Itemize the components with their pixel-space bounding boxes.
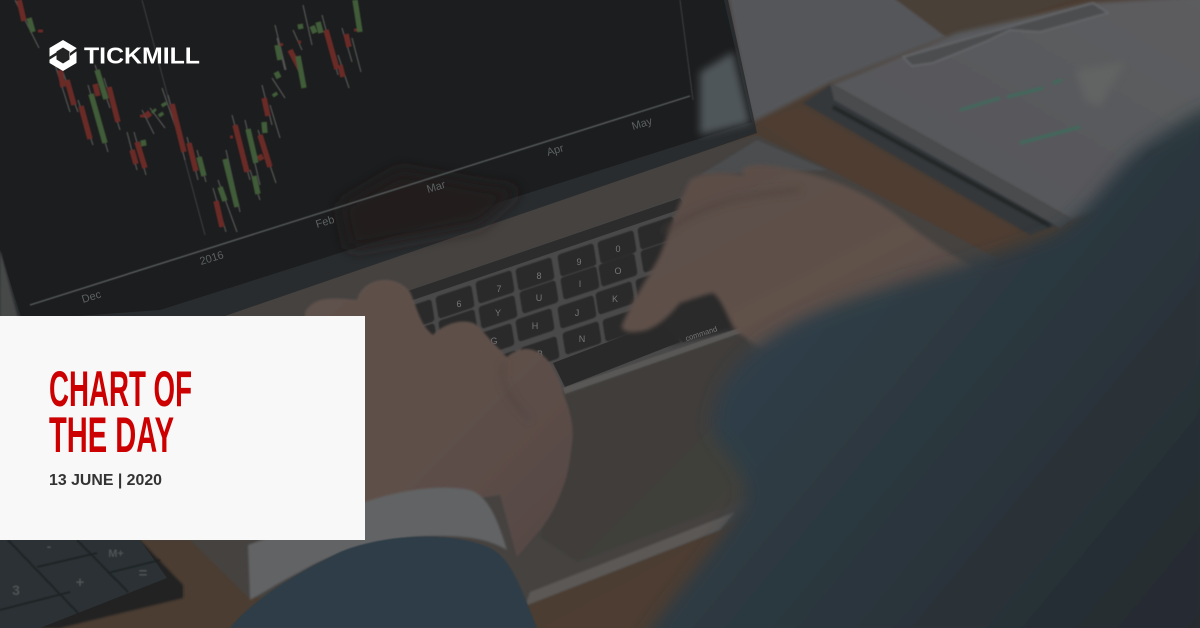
key labels: N [579, 334, 585, 344]
spacebar [553, 322, 680, 387]
key labels: K [612, 294, 618, 304]
key labels: 6 [456, 299, 462, 309]
calculator [0, 538, 183, 628]
key labels: B [537, 349, 543, 359]
calculator key labels: + [76, 574, 85, 591]
laptop base [0, 135, 1000, 606]
keyboard [370, 196, 760, 394]
chart axis labels: Apr [545, 142, 566, 159]
right hand [622, 165, 975, 350]
paperwork on desk [728, 0, 1200, 235]
paper clip bar [903, 3, 1108, 66]
key labels: H [532, 321, 538, 331]
chart axis labels: 2016 [198, 249, 225, 268]
heading: CHART OF [49, 361, 192, 417]
calculator key labels: 3 [12, 582, 20, 598]
key labels: G [490, 336, 498, 346]
logo: Tickmill [49, 40, 200, 71]
logo wordmark: TICKMILL [84, 42, 200, 68]
shadow under right hand [640, 275, 760, 345]
key labels: 8 [536, 271, 542, 281]
heading: THE DAY [49, 407, 174, 463]
trackpad [540, 332, 770, 562]
key labels: Y [495, 308, 501, 318]
chart axis labels: Dec [80, 289, 103, 306]
screen reflection [700, 52, 750, 135]
key labels: I [579, 279, 581, 289]
calculator key labels: M+ [108, 548, 124, 560]
chart axis labels: Mar [425, 179, 447, 196]
candlestick chart [15, 0, 693, 305]
shirt cuff [248, 488, 507, 600]
heading [49, 361, 192, 463]
chart axis labels [80, 115, 654, 306]
chart axis labels: May [630, 115, 654, 133]
icon: hexagon mark [49, 40, 77, 71]
key labels: 0 [615, 244, 621, 254]
key labels: 7 [496, 284, 502, 294]
key labels: 9 [576, 257, 582, 267]
calculator key labels: - [47, 538, 52, 554]
panel: chart of the day [0, 316, 365, 540]
left sleeve [230, 537, 537, 628]
calculator key labels: = [139, 565, 148, 582]
key labels: command [684, 324, 718, 343]
date: 13 JUNE | 2020 [49, 472, 162, 489]
key labels: O [614, 266, 622, 276]
blurred suit shoulder [640, 105, 1200, 628]
chart axis labels: Feb [314, 214, 336, 231]
key labels: U [536, 293, 542, 303]
calculator key labels [12, 538, 148, 598]
key labels: J [575, 308, 579, 318]
key labels [456, 244, 718, 359]
command key [662, 310, 728, 342]
laptop lid and screen [0, 0, 757, 340]
left hand [300, 280, 573, 557]
